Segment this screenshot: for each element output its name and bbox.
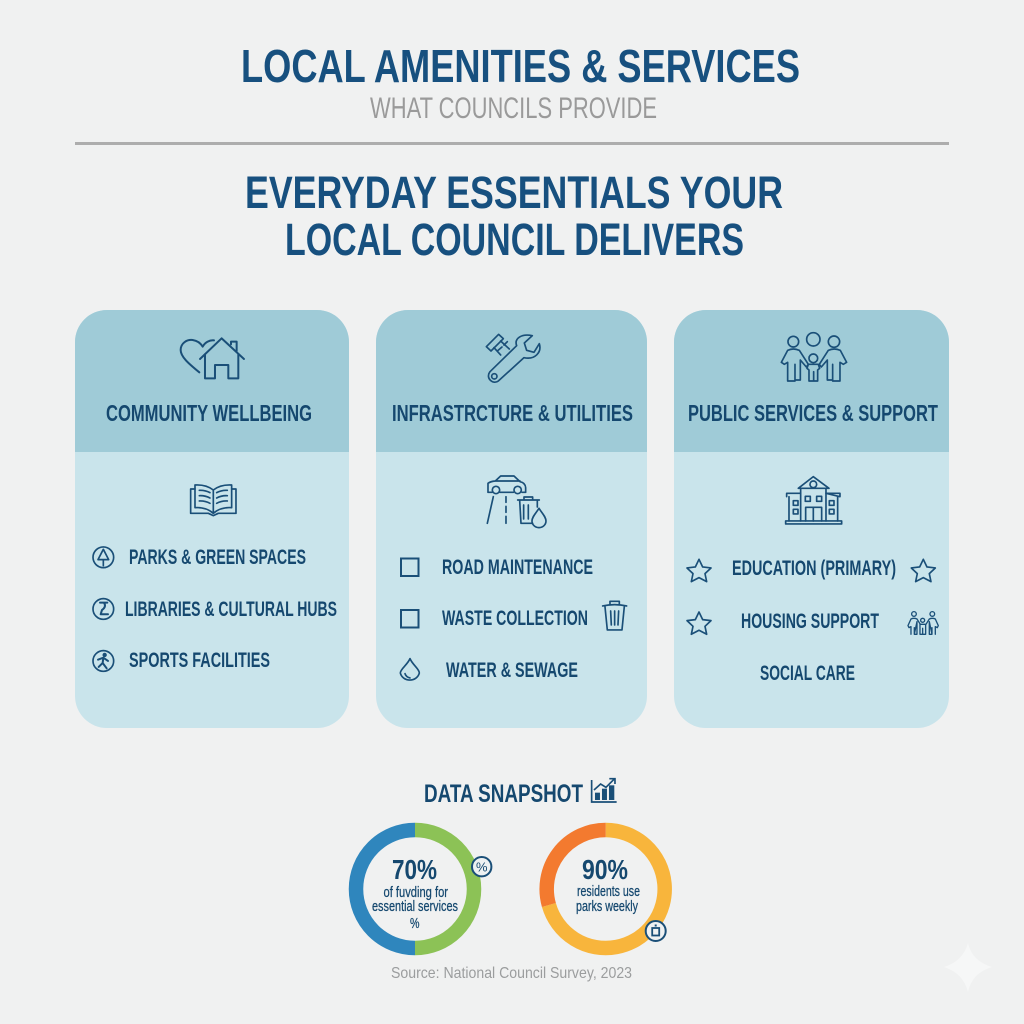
list item: libraries: LIBRARIES & CULTURAL HUBS [125, 598, 337, 621]
panel header: community wellbeing [75, 310, 349, 452]
list item: parks: PARKS & GREEN SPACES [129, 546, 306, 569]
donut chart: 70% funding [356, 830, 491, 948]
donut label: 90%: parks weekly [576, 898, 638, 915]
icon: open book [191, 485, 236, 516]
panel header: infrastructure [376, 310, 647, 452]
panel: community wellbeing [75, 310, 349, 728]
donut label: 70%: % [410, 915, 420, 932]
heading: community wellbeing: COMMUNITY WELLBEING [106, 400, 312, 426]
donut label: 90%: 90% [582, 854, 628, 885]
icon: wrench and tool [486, 334, 540, 382]
icon: heart and house [181, 338, 244, 378]
icon: family [781, 333, 847, 381]
panel header: public services [674, 310, 949, 452]
panel: infrastructure and utilities [376, 310, 647, 728]
list item: parks [93, 546, 306, 569]
donut label: 90% [576, 854, 640, 915]
badge: person [646, 921, 666, 941]
heading: infrastructure: INFRASTRCTURE & UTILITIES [392, 400, 633, 426]
donut label: 70%: 70% [392, 854, 437, 885]
main heading [245, 167, 783, 265]
donut label: 70%: of fuvding for [384, 884, 448, 901]
list item: libraries [93, 598, 337, 621]
source note: Source: National Council Survey, 2023 [391, 965, 632, 982]
list item: water and sewage [400, 659, 578, 682]
icon: sparkle watermark [944, 943, 992, 992]
list item: social care: SOCIAL CARE [760, 662, 855, 685]
list item: water and sewage: WATER & SEWAGE [446, 659, 578, 682]
badge: percent: % [476, 860, 488, 874]
donut label: 70%: essential services [372, 898, 458, 915]
main heading: LOCAL COUNCIL DELIVERS [285, 214, 744, 265]
panel: public services and support [674, 310, 949, 728]
list item: waste collection: WASTE COLLECTION [442, 607, 588, 630]
list item: education [687, 557, 935, 582]
donut label: 90%: residents use [577, 883, 640, 900]
list item: sports [93, 649, 270, 672]
donut label: 70% [372, 854, 458, 932]
list item: education: EDUCATION (PRIMARY) [732, 557, 896, 580]
list item: waste collection [401, 601, 627, 630]
list item: road maintenance [401, 556, 593, 579]
main heading: EVERYDAY ESSENTIALS YOUR [245, 167, 783, 218]
list item: road maintenance: ROAD MAINTENANCE [442, 556, 593, 579]
icon: car, road, bin and drop [487, 476, 546, 528]
list item: sports: SPORTS FACILITIES [129, 649, 270, 672]
donut chart: 90% parks [547, 830, 666, 948]
list item: housing support: HOUSING SUPPORT [741, 610, 879, 633]
title: LOCAL AMENITIES & SERVICES [241, 40, 800, 92]
subtitle: WHAT COUNCILS PROVIDE [370, 92, 657, 125]
icon: bar chart [592, 779, 617, 802]
data snapshot heading: DATA SNAPSHOT [424, 780, 583, 808]
icon: school building [786, 477, 842, 524]
